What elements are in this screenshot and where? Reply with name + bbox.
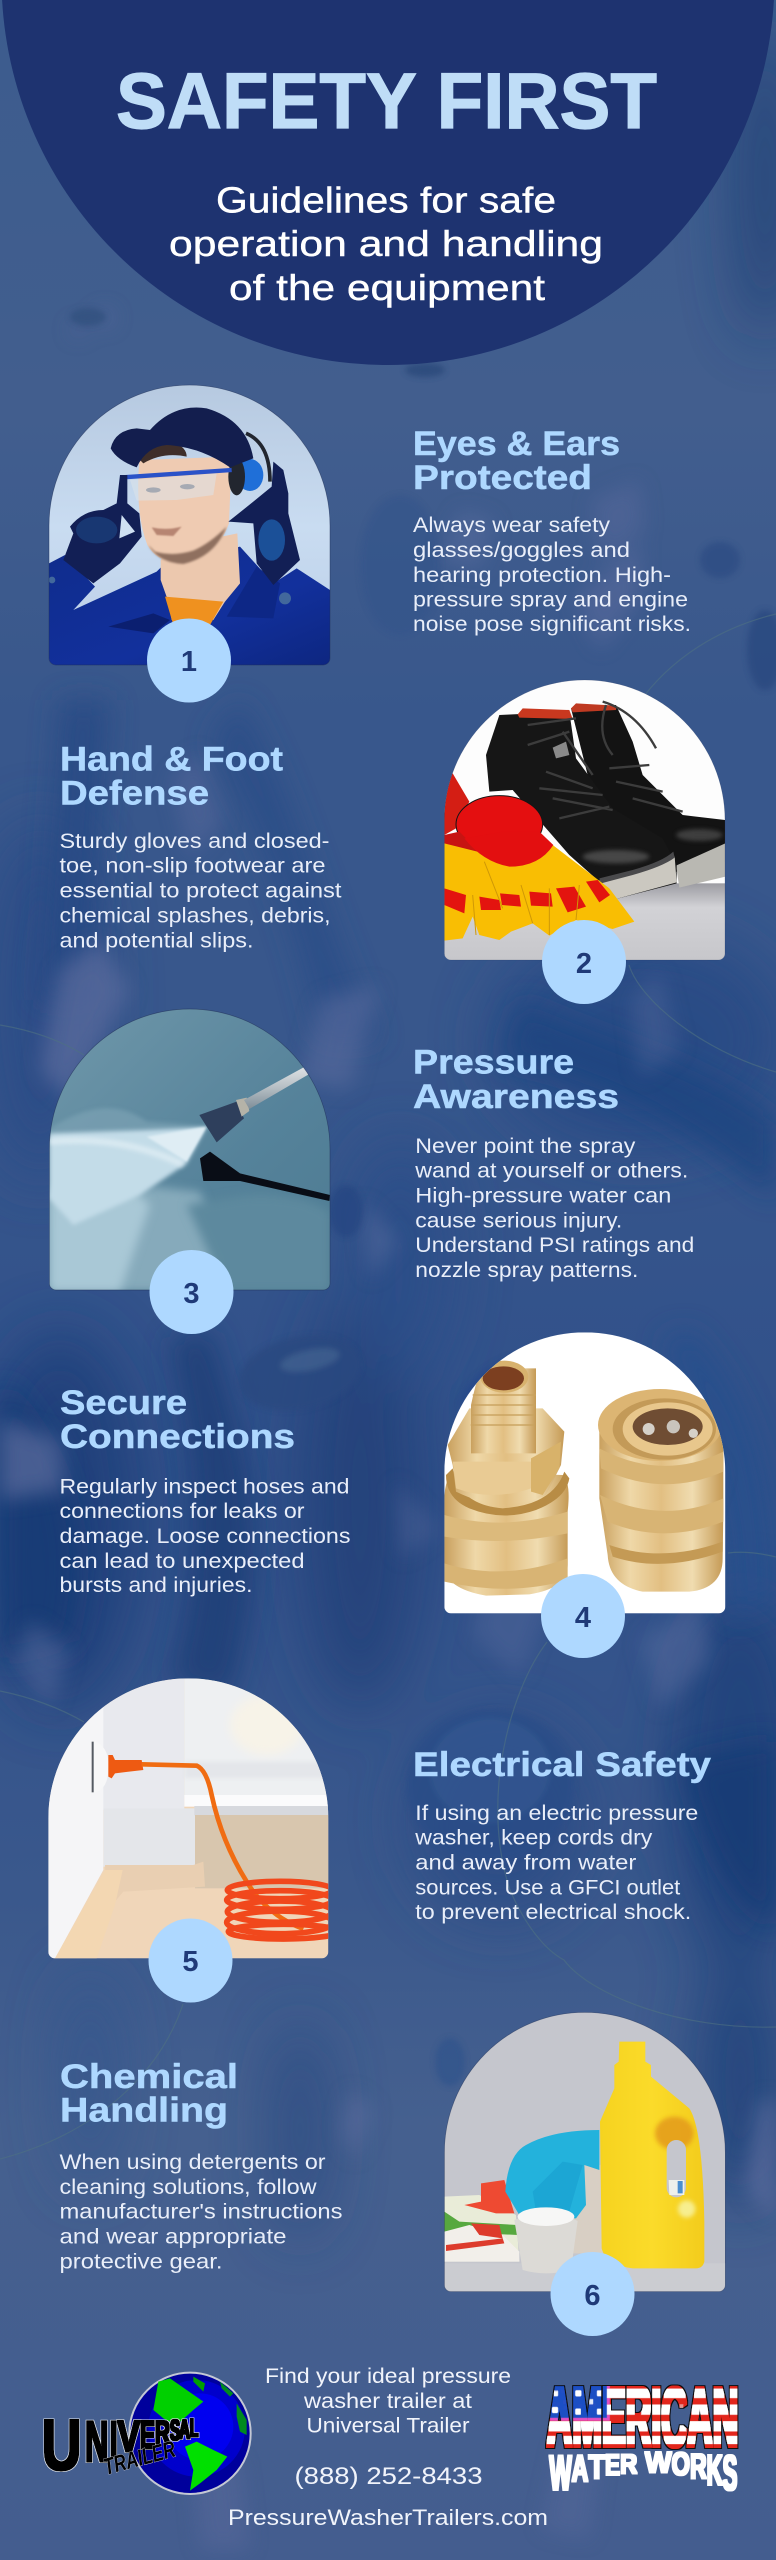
body text: to prevent electrical shock. [415,1901,691,1924]
header circle [2,0,774,365]
wordmark: R [155,2413,170,2450]
footer: american water works logo: R [620,2448,637,2479]
title: SAFETY FIRST [116,56,657,145]
wordmark [42,2406,198,2486]
wordmark: S [170,2415,180,2447]
wordmark: E [140,2413,155,2457]
subtitle: Guidelines for safe [216,180,556,220]
globe [129,2373,251,2494]
footer: call to action text [228,2365,548,2530]
body text: cause serious injury. [415,1209,622,1232]
photo: worker with goggles and ear muffs [47,383,333,670]
panel: step 1 eyes and ears [47,383,691,702]
heading: Hand & Foot [60,740,283,778]
heading: Defense [60,774,209,812]
footer: american water works logo: E [605,2449,620,2482]
photo: boots and gloves [443,678,729,965]
photo: orange extension cord plugged in [47,1677,338,1963]
footer: american water works logo [547,2371,738,2501]
heading: Electrical Safety [413,1746,711,1784]
number badge 1 [147,618,231,702]
heading: Eyes & Ears [413,425,620,463]
heading: Awareness [413,1078,619,1116]
wordmark: L [190,2416,198,2443]
heading [413,1044,619,1116]
footer: call to action text: washer trailer at [303,2390,472,2413]
body text [60,830,342,952]
body text: When using detergents or [60,2151,326,2174]
body text: pressure spray and engine [413,588,688,612]
photo: detergent bottle and laundry [443,2010,729,2297]
wordmark: U [42,2406,82,2486]
footer: american water works logo: O [672,2445,690,2482]
number badge 4: 4 [575,1602,591,1634]
heading [60,740,283,812]
body text: hearing protection. High- [413,564,671,587]
body text: bursts and injuries. [60,1574,252,1597]
photo: pressure wand spraying water [47,1008,333,1295]
wordmark: A [179,2414,190,2444]
subtitle [169,180,603,308]
body text: Regularly inspect hoses and [60,1476,350,1498]
heading: Pressure [413,1044,574,1082]
number badge 5 [148,1918,232,2002]
footer: call to action text: PressureWasherTrailers.com [228,2505,548,2530]
body text: wand at yourself or others. [414,1160,688,1183]
heading: Chemical [60,2058,238,2096]
heading: Connections [60,1418,295,1456]
subtitle: operation and handling [169,223,603,264]
number badge 6 [550,2252,634,2336]
footer: american water works logo: T [588,2448,605,2486]
heading: Secure [60,1384,187,1422]
body text: Sturdy gloves and closed- [60,830,330,853]
body text [414,1802,698,1924]
panel: step 4 secure connections [60,1330,729,1658]
right connector [598,1389,723,1592]
body text: damage. Loose connections [60,1525,350,1548]
body text [60,1476,350,1597]
panel: step 3 pressure awareness [47,1008,694,1334]
body text: nozzle spray patterns. [415,1259,638,1282]
panel: step 5 electrical safety [47,1677,711,2002]
body text: Never point the spray [415,1135,636,1158]
body text: toe, non-slip footwear are [60,855,326,878]
left connector [444,1361,569,1596]
number badge 3: 3 [183,1278,200,1310]
heading [413,425,620,497]
body text: essential to protect against [60,880,342,902]
body text: glasses/goggles and [413,539,630,562]
body text: and potential slips. [60,929,254,952]
body text: noise pose significant risks. [413,613,691,636]
body text: chemical splashes, debris, [60,904,330,927]
number badge 6: 6 [584,2280,601,2312]
photo: brass quick connectors [443,1330,729,1617]
number badge 1: 1 [181,646,197,678]
body text: Understand PSI ratings and [415,1234,694,1257]
heading [60,1384,295,1456]
footer: american water works logo: A [572,2448,588,2491]
body text [60,2151,342,2274]
body text: cleaning solutions, follow [60,2176,317,2199]
footer: american water works logo: W [645,2447,672,2480]
wordmark: TRAILER [101,2436,178,2480]
footer: american water works logo: W [549,2445,572,2501]
number badge 2: 2 [576,948,592,980]
number badge 5: 5 [182,1946,199,1978]
heading [60,2058,238,2130]
number badge 4 [541,1574,625,1658]
footer: american water works logo: K [707,2446,723,2495]
body text: washer, keep cords dry [414,1826,653,1850]
body text: and wear appropriate [60,2226,286,2249]
body text: If using an electric pressure [415,1802,698,1825]
bubbles [70,308,776,2086]
text: S [723,2445,737,2501]
footer: call to action text: (888) 252-8433 [294,2463,482,2490]
wordmark: I [110,2411,117,2468]
number badge 2 [542,920,626,1004]
number badge 3 [150,1250,234,1334]
body text: manufacturer's instructions [60,2201,342,2224]
heading: Handling [60,2092,228,2130]
footer: american water works logo: R [690,2447,707,2486]
body text: and away from water [415,1851,636,1874]
body text: High-pressure water can [415,1184,671,1207]
footer: call to action text: Find your ideal pressure [265,2365,511,2388]
body text: Always wear safety [413,514,611,537]
body text: can lead to unexpected [60,1550,304,1573]
footer: universal trailer logo [42,2373,251,2494]
panel: step 6 chemical handling [60,2010,729,2336]
panel: step 2 hand and foot [60,678,729,1004]
wordmark: N [85,2410,108,2475]
body text: protective gear. [60,2250,222,2274]
wordmark: V [117,2413,140,2462]
footer: call to action text: Universal Trailer [306,2415,470,2438]
body text: connections for leaks or [60,1500,304,1523]
body text [413,514,691,636]
thin arc lines [0,614,776,2159]
heading: Protected [413,459,592,497]
subtitle: of the equipment [229,267,545,308]
body text [414,1135,694,1282]
body text: sources. Use a GFCI outlet [415,1876,680,1899]
